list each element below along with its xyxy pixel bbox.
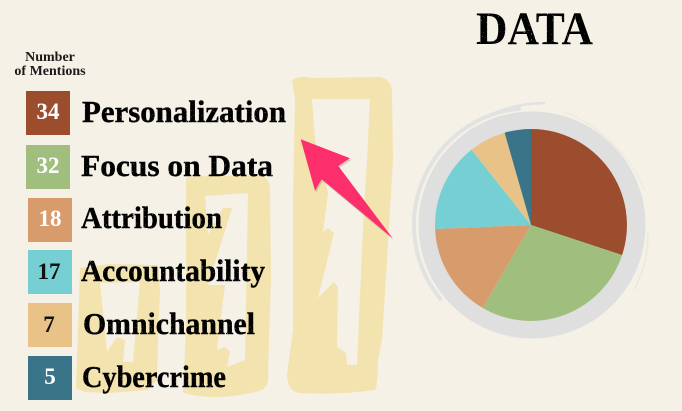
list row: Cybercrime [28,356,226,400]
list row: Omnichannel: Omnichannel [83,306,255,341]
medium bar [183,176,271,397]
list row: Omnichannel: 7 [43,312,55,337]
list row: Accountability [28,250,265,294]
small bar [76,264,160,393]
list row: Attribution: 18 [38,206,62,231]
brush ring [414,103,648,329]
column heading: number of mentions: of Mentions [14,64,86,79]
bar chart: hand-painted bars [76,77,393,397]
column heading: number of mentions: Number [25,50,75,65]
list row: Attribution: Attribution [81,200,222,235]
slice: Focus on Data [483,225,622,321]
list row: Personalization: Personalization [82,94,286,129]
list row: Focus on Data: 32 [36,153,60,178]
slice: Omnichannel [472,133,531,225]
column heading: number of mentions [14,50,86,79]
list row: Attribution [28,198,222,242]
list row: Personalization: 34 [36,99,60,124]
list row: Cybercrime: 5 [44,364,56,389]
list row: Personalization [26,91,286,135]
list row: Accountability: Accountability [81,253,265,288]
pie chart [414,103,648,329]
list row: Accountability: 17 [38,259,60,284]
title: DATA [476,3,593,55]
list row: Focus on Data: Focus on Data [81,148,274,183]
slice: Attribution [435,225,531,308]
slice: Cybercrime [505,129,531,225]
list row: Cybercrime: Cybercrime [82,359,226,394]
tall bar [287,77,393,394]
slice: Accountability [435,150,531,229]
arrow [301,139,394,240]
list row: Omnichannel [28,303,255,347]
slice: Personalization [531,129,627,255]
list row: Focus on Data [26,145,274,189]
